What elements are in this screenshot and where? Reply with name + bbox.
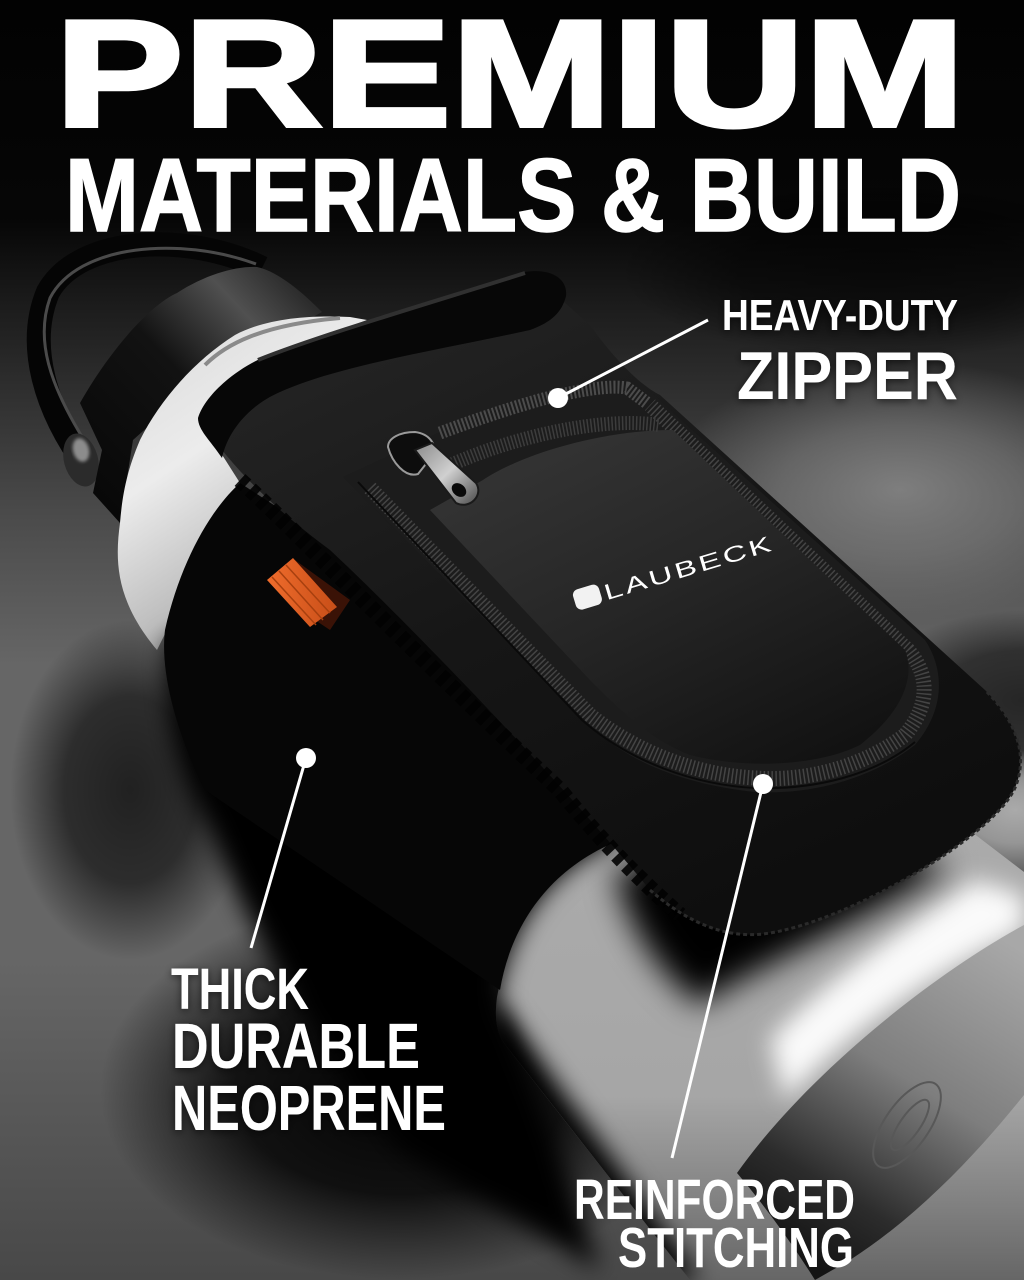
pouch cast shadow	[615, 830, 950, 1005]
lower left shading	[480, 1000, 700, 1280]
pocket panel	[430, 430, 909, 764]
bottle lower body	[480, 820, 1024, 1280]
sleeve upper	[164, 483, 620, 990]
neoprene label	[171, 957, 446, 1144]
bottle base	[737, 925, 1024, 1280]
neoprene label: NEOPRENE	[172, 1072, 446, 1144]
pocket stitching	[370, 405, 924, 779]
sleeve lower soft edge	[167, 600, 620, 1270]
zipper label	[722, 291, 958, 414]
neoprene label: DURABLE	[172, 1010, 420, 1082]
stitching label second line: STITCHING	[618, 1216, 854, 1280]
orange pull tab	[267, 558, 350, 630]
neck ring shadow	[205, 318, 340, 365]
neoprene leader line	[251, 748, 316, 948]
stitching label: REINFORCED	[574, 1168, 855, 1232]
title	[55, 0, 965, 254]
callout: zipper	[548, 291, 958, 414]
neoprene label: THICK	[171, 957, 309, 1022]
callout: neoprene	[171, 748, 446, 1144]
stitching leader line	[672, 774, 773, 1158]
zipper tape	[440, 423, 660, 470]
bottle cap	[80, 267, 322, 523]
zipper label: ZIPPER	[737, 338, 958, 414]
callout: stitching	[574, 774, 855, 1232]
pouch body	[200, 272, 1021, 935]
serrated edge	[240, 480, 680, 915]
zipper leader line	[548, 320, 708, 408]
zipper track	[440, 387, 647, 433]
brand logo	[571, 530, 777, 614]
pouch flap	[198, 271, 566, 458]
zipper label: HEAVY-DUTY	[722, 291, 958, 340]
bottle handle	[39, 244, 262, 490]
logo wordmark: LAUBECK	[601, 530, 777, 605]
base engraving	[860, 1071, 954, 1179]
bottle	[39, 244, 1024, 1280]
logo badge	[571, 583, 603, 611]
neoprene sleeve body	[164, 483, 620, 1270]
bottle upper body	[118, 316, 367, 650]
phone pouch	[198, 271, 1021, 935]
zipper pull	[388, 432, 478, 505]
lit band	[770, 880, 1024, 1100]
zipper pocket outline	[343, 380, 939, 792]
